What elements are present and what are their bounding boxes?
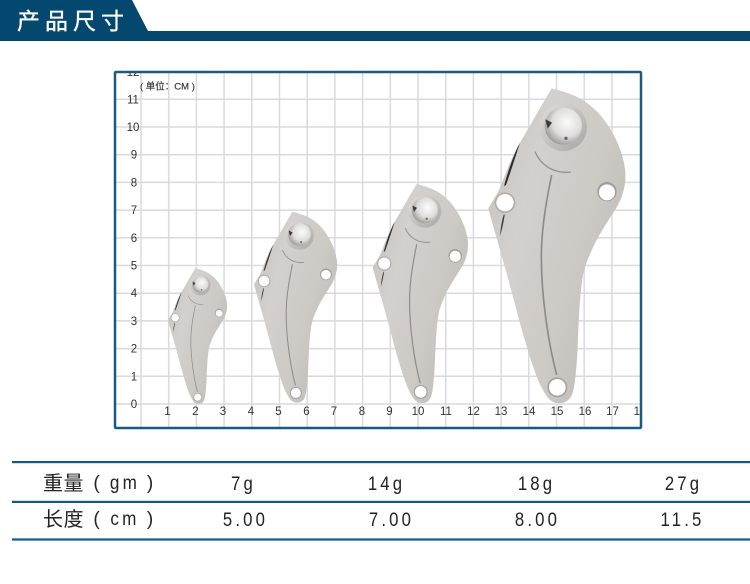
x axis labels: 17 bbox=[606, 406, 619, 418]
y axis labels: 12 bbox=[127, 67, 139, 79]
row: weight: gm bbox=[110, 472, 140, 493]
x axis labels: 8 bbox=[359, 406, 365, 418]
x axis labels: 10 bbox=[412, 406, 424, 418]
row: weight: ( bbox=[93, 473, 100, 494]
row: length: 11.5 bbox=[661, 509, 704, 530]
x axis labels: 11 bbox=[440, 406, 452, 418]
row: weight: 重量 bbox=[43, 472, 84, 495]
y axis labels: 3 bbox=[131, 316, 137, 328]
row: weight: 18g bbox=[518, 473, 555, 494]
x axis labels: 7 bbox=[331, 406, 337, 418]
lure: 5 cm bbox=[168, 268, 227, 404]
row: length: 7.00 bbox=[369, 509, 414, 530]
x axis labels: 14 bbox=[523, 406, 536, 418]
unit label: ( 单位：CM ) bbox=[140, 80, 195, 92]
x axis labels: 1 bbox=[164, 406, 171, 418]
x axis labels: 16 bbox=[579, 406, 591, 418]
lure: 7 cm bbox=[254, 212, 337, 403]
y axis labels: 2 bbox=[131, 344, 137, 356]
chart frame bbox=[115, 72, 641, 428]
row: length bbox=[43, 508, 704, 531]
x axis labels: 5 bbox=[275, 406, 282, 418]
y axis labels: 11 bbox=[127, 94, 139, 106]
y axis labels: 5 bbox=[131, 260, 137, 272]
row: length: cm bbox=[110, 508, 140, 529]
x axis labels: 4 bbox=[248, 406, 255, 418]
x axis labels: 6 bbox=[303, 406, 310, 418]
y axis labels: 7 bbox=[131, 205, 137, 217]
row: weight: 14g bbox=[368, 473, 405, 494]
row: length: ) bbox=[147, 509, 153, 530]
x axis labels: 15 bbox=[551, 406, 563, 418]
row: length: 长度 bbox=[43, 508, 84, 531]
x axis labels: 9 bbox=[386, 406, 393, 418]
row: weight: ) bbox=[147, 473, 153, 494]
row: length: 8.00 bbox=[515, 509, 560, 530]
y axis labels: 1 bbox=[131, 371, 137, 383]
x axis labels: 13 bbox=[495, 406, 507, 418]
row: weight: 27g bbox=[665, 473, 702, 494]
y axis labels: 6 bbox=[131, 233, 137, 245]
x axis labels: 2 bbox=[192, 406, 199, 418]
spec table bbox=[12, 461, 750, 541]
row: length: ( bbox=[93, 509, 100, 530]
chart grid bbox=[116, 72, 640, 428]
y axis labels bbox=[128, 73, 139, 408]
title tab bbox=[0, 0, 148, 32]
title: 产品尺寸 bbox=[17, 8, 129, 34]
x axis labels: 3 bbox=[220, 406, 226, 418]
x axis labels: 12 bbox=[467, 406, 480, 418]
y axis labels: 4 bbox=[131, 288, 138, 300]
header band bbox=[0, 0, 750, 41]
x axis labels bbox=[165, 406, 640, 415]
y axis labels: 0 bbox=[131, 399, 137, 411]
panel: size chart bbox=[115, 67, 646, 428]
lure: 11.5 cm bbox=[488, 88, 625, 403]
y axis labels: 8 bbox=[131, 177, 137, 189]
row: length: 5.00 bbox=[223, 509, 268, 530]
y axis labels: 10 bbox=[127, 122, 139, 134]
row: weight: 7g bbox=[231, 473, 256, 494]
x axis labels: 18 bbox=[634, 406, 646, 418]
y axis labels: 9 bbox=[131, 150, 137, 162]
lure: 8 cm bbox=[373, 184, 468, 403]
row: weight bbox=[43, 472, 702, 495]
